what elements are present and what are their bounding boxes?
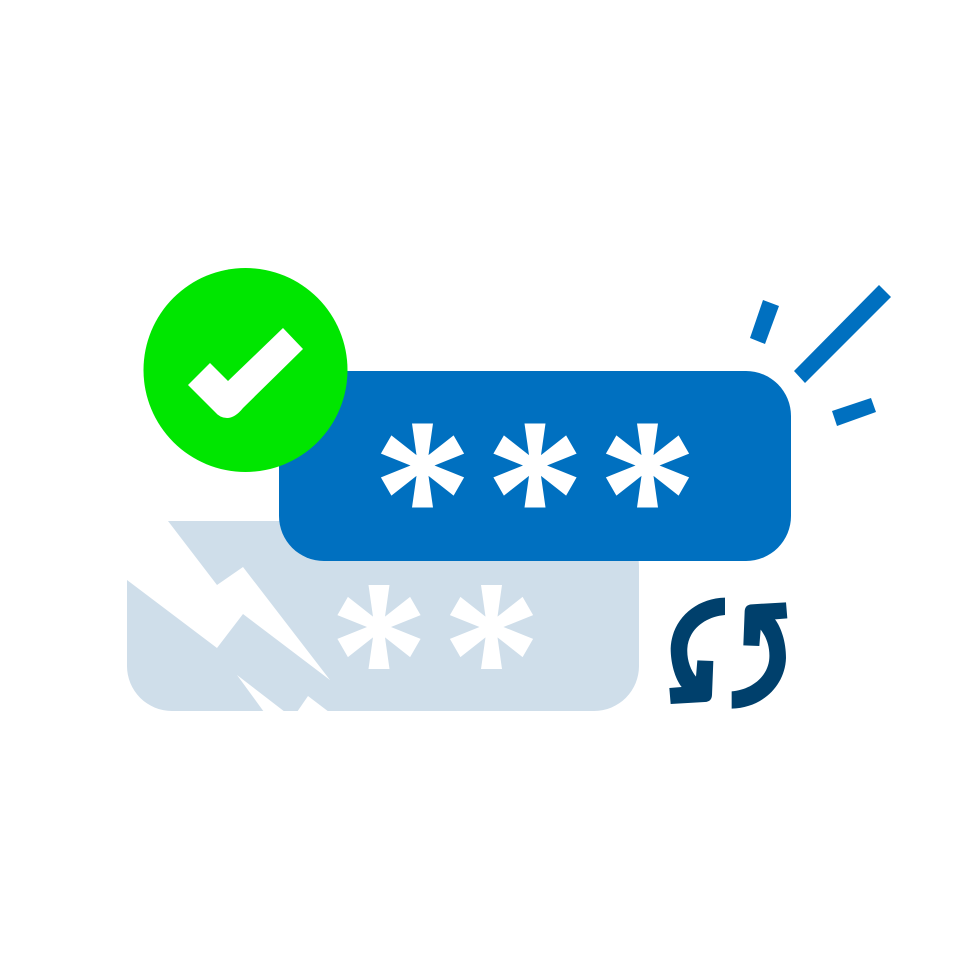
arrow: right, pointing up	[732, 602, 787, 709]
icon: highlight rays	[750, 285, 891, 426]
panel: new password field	[279, 371, 791, 561]
asterisk: new password second character	[493, 424, 577, 508]
crack: lower right fragment	[297, 696, 329, 712]
asterisk: old password second character	[450, 585, 533, 669]
ray: long diagonal	[794, 285, 891, 383]
asterisk: old password first character	[337, 585, 421, 669]
crack: lower left fragment	[237, 675, 285, 712]
ray: short lower	[832, 398, 876, 426]
icon: refresh arrows	[669, 598, 787, 709]
ray: short upper	[750, 300, 779, 344]
icon: white check mark	[188, 328, 303, 418]
arrow: left, pointing down	[669, 598, 725, 704]
icon: green check badge	[144, 268, 348, 472]
asterisk: new password third character	[606, 424, 689, 508]
panel: broken old password field	[127, 521, 639, 712]
asterisk: new password first character	[381, 424, 464, 508]
